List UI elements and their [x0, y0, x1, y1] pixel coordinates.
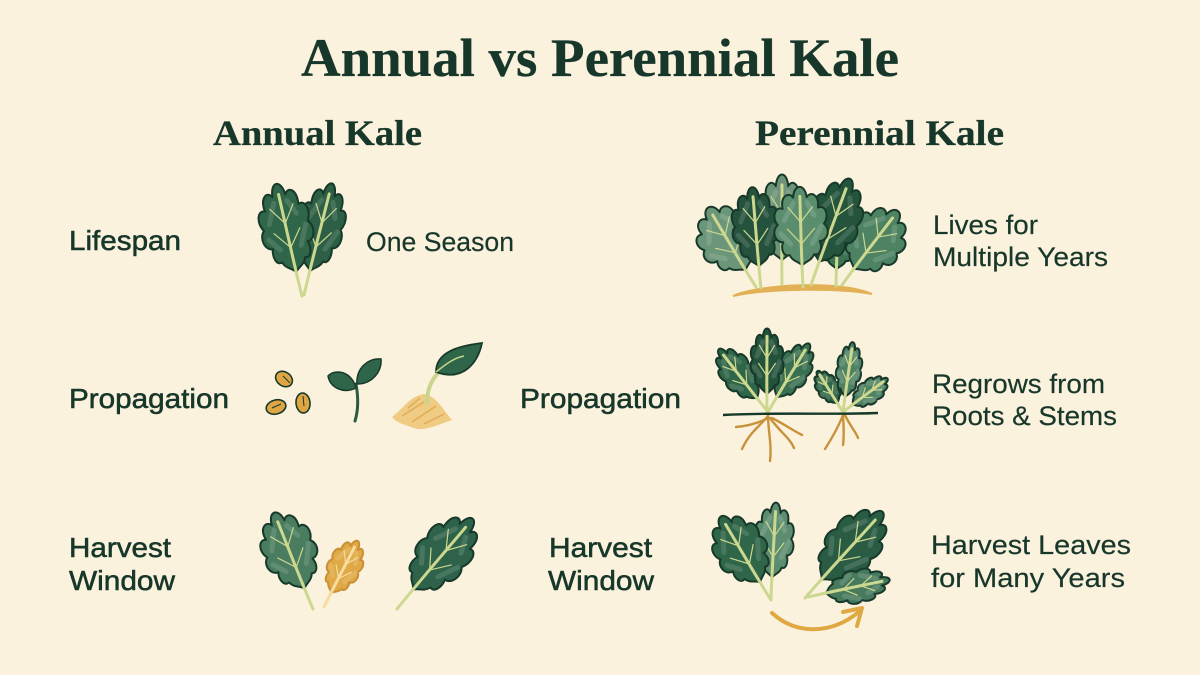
- text: regrows from roots and stems: [932, 369, 1117, 431]
- text: lives for multiple years: Multiple Years: [933, 242, 1108, 272]
- text: lives for multiple years: [933, 210, 1108, 272]
- label: harvest window annual: Window: [69, 565, 176, 596]
- icon: seeds, sprout, seedling: [265, 343, 482, 429]
- text: harvest leaves for many years: [931, 530, 1131, 593]
- label: harvest window annual: Harvest: [69, 532, 171, 563]
- icon: plants regrowing from roots: [706, 329, 895, 461]
- label: lifespan: Lifespan: [69, 225, 181, 256]
- text: regrows from roots and stems: Roots & Stems: [932, 401, 1117, 431]
- text: lives for multiple years: Lives for: [933, 210, 1038, 240]
- icon: perennial kale clump: [683, 170, 920, 302]
- roots: [736, 415, 858, 461]
- label: harvest window perennial: [548, 532, 655, 596]
- column heading: annual kale: Annual Kale: [213, 113, 422, 153]
- label: propagation annual: Propagation: [69, 383, 229, 414]
- icon: perennial harvested leaves: [699, 494, 902, 615]
- text: one season: One Season: [366, 227, 514, 257]
- sprout: [355, 384, 358, 421]
- label: harvest window perennial: Window: [548, 565, 655, 596]
- ground mound: [733, 285, 872, 296]
- seeds: [265, 368, 311, 416]
- seedling stem: [427, 364, 448, 403]
- label: propagation perennial: Propagation: [520, 383, 681, 414]
- icon: annual harvested leaves: [249, 502, 493, 626]
- soil line: [723, 413, 878, 415]
- soil mound: [392, 394, 452, 429]
- arrow: [772, 608, 862, 629]
- text: harvest leaves for many years: for Many Years: [931, 563, 1125, 593]
- title: Annual vs Perennial Kale: [301, 28, 899, 88]
- icon: annual kale leaves: [251, 178, 354, 302]
- label: harvest window annual: [69, 532, 176, 596]
- text: regrows from roots and stems: Regrows from: [932, 369, 1105, 399]
- seedling leaf: [436, 343, 482, 375]
- column heading: perennial kale: Perennial Kale: [755, 113, 1004, 153]
- label: harvest window perennial: Harvest: [549, 532, 652, 563]
- text: harvest leaves for many years: Harvest Leaves: [931, 530, 1131, 560]
